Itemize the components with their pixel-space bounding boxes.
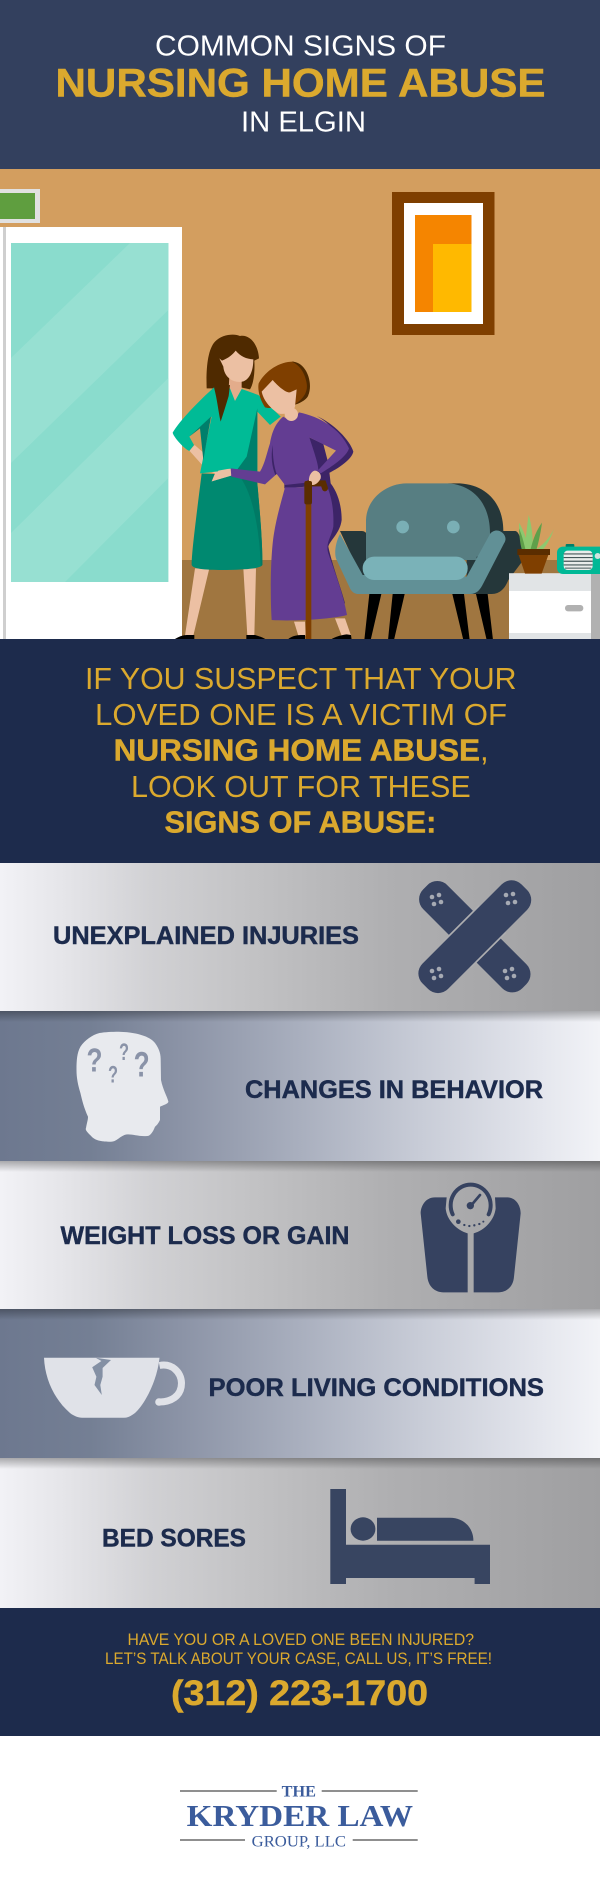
intro line 5: SIGNS OF ABUSE:	[164, 804, 436, 840]
label: WEIGHT LOSS OR GAIN	[60, 1222, 350, 1250]
sign 4: poor living conditions	[0, 1309, 600, 1458]
side table	[509, 573, 600, 640]
intro line 3: NURSING HOME ABUSE,	[114, 732, 489, 768]
title line 3: IN ELGIN	[241, 106, 366, 138]
header panel	[0, 0, 600, 169]
title line 1: COMMON SIGNS OF	[155, 30, 446, 62]
sign 2: changes in behavior	[0, 1011, 600, 1161]
intro line 4: LOOK OUT FOR THESE	[131, 769, 471, 804]
label: BED SORES	[102, 1524, 246, 1552]
label: CHANGES IN BEHAVIOR	[245, 1076, 543, 1104]
illustration: nursing home room	[0, 169, 600, 640]
call-to-action line 2: LET’S TALK ABOUT YOUR CASE, CALL US, IT’S FREE!	[105, 1650, 492, 1668]
intro line 2: LOVED ONE IS A VICTIM OF	[95, 697, 507, 732]
potted plant	[517, 515, 554, 574]
side table, plant and radio	[509, 515, 600, 640]
logo: THE	[282, 1784, 316, 1800]
exit sign	[0, 189, 40, 223]
icon: crossed bandages	[413, 874, 537, 999]
label: UNEXPLAINED INJURIES	[53, 922, 359, 950]
footer call to action	[0, 1608, 600, 1736]
framed picture	[392, 192, 494, 335]
logo: GROUP, LLC	[252, 1834, 346, 1850]
title line 2: NURSING HOME ABUSE	[56, 62, 546, 106]
icon: person in bed	[330, 1489, 490, 1584]
intro panel	[0, 639, 600, 863]
icon: head with question marks: ?	[134, 1046, 150, 1085]
armchair	[335, 483, 523, 640]
sign 5: bed sores	[0, 1458, 600, 1608]
sign 3: weight loss or gain	[0, 1161, 600, 1309]
label: POOR LIVING CONDITIONS	[208, 1374, 544, 1402]
icon: head with question marks: ?	[119, 1039, 129, 1066]
icon: head with question marks: ?	[86, 1042, 102, 1079]
logo	[180, 1784, 418, 1850]
icon: cracked cup	[44, 1358, 182, 1418]
icon: head with question marks: ?	[108, 1062, 118, 1089]
figure: elderly woman with cane	[231, 362, 353, 640]
logo: KRYDER LAW	[187, 1798, 413, 1833]
radio	[557, 544, 600, 574]
phone number: (312) 223-1700	[171, 1674, 428, 1713]
icon: head with question marks	[76, 1032, 168, 1142]
door with glass	[0, 227, 182, 640]
call-to-action line 1: HAVE YOU OR A LOVED ONE BEEN INJURED?	[128, 1631, 474, 1649]
icon: bathroom scale	[421, 1185, 521, 1292]
figure: caregiver	[173, 335, 281, 640]
intro line 1: IF YOU SUSPECT THAT YOUR	[85, 661, 517, 696]
sign 1: unexplained injuries	[0, 863, 600, 1011]
